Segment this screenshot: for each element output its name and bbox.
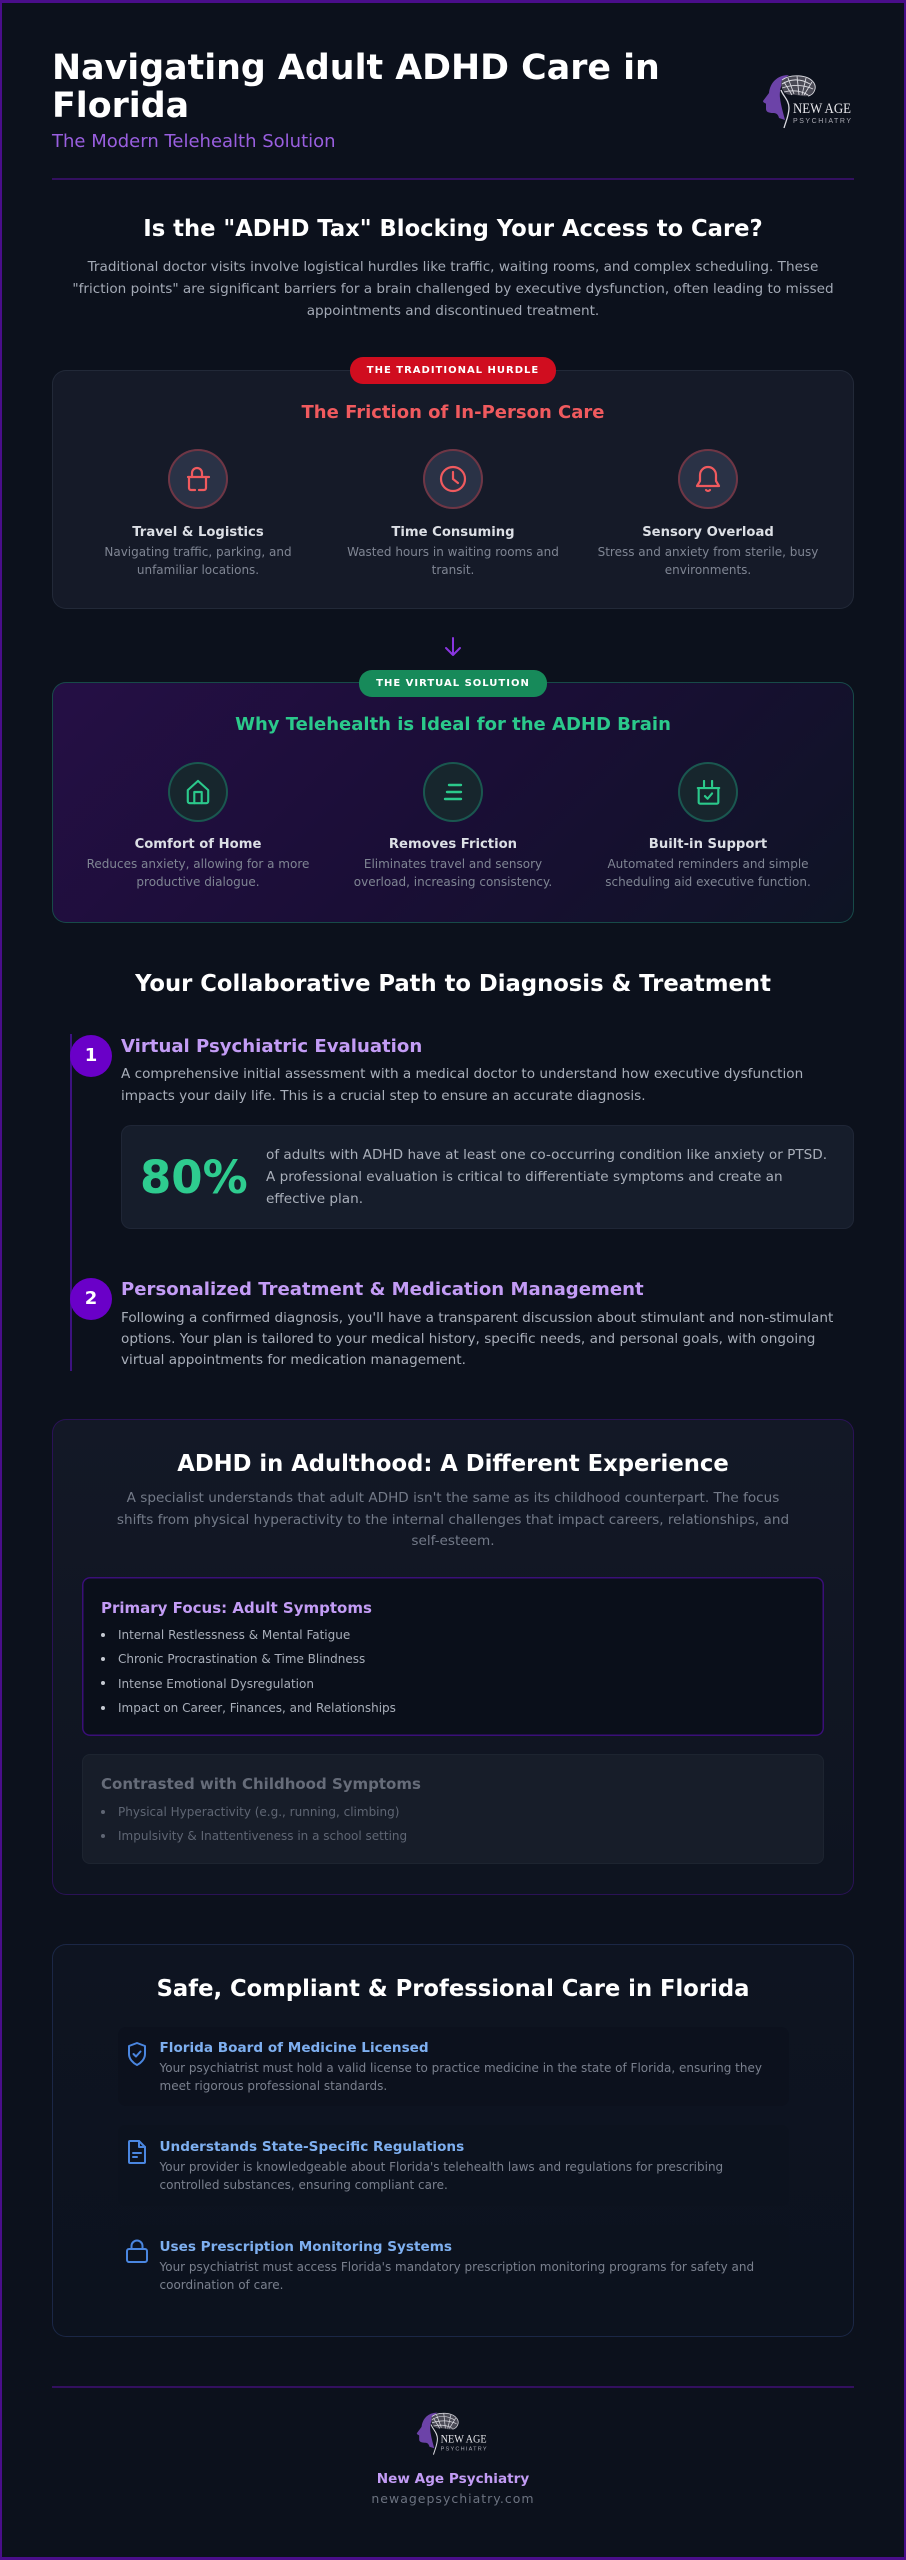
step 1 description: A comprehensive initial assessment with a medical doctor to understand how executive dysfunction xyxy=(121,1066,803,1082)
symptom list xyxy=(101,1628,396,1715)
step 2 description: options. Your plan is tailored to your medical history, specific needs, and personal goals, with ongoing xyxy=(121,1331,815,1347)
feature: time consuming: transit. xyxy=(432,563,474,577)
icon: lock xyxy=(126,2240,148,2263)
step 2 description xyxy=(121,1310,833,1368)
step 2 description: virtual appointments for medication management. xyxy=(121,1352,466,1368)
subtitle: The Modern Telehealth Solution xyxy=(52,131,336,152)
symptom list: Intense Emotional Dysregulation xyxy=(118,1677,314,1691)
logo: New Age Psychiatry header: PSYCHIATRY xyxy=(793,118,851,125)
feature: comfort of home xyxy=(87,762,309,889)
panel description xyxy=(117,1490,789,1549)
intro paragraph xyxy=(72,258,834,318)
icon: travel bag xyxy=(168,449,228,509)
panel description: A specialist understands that adult ADHD isn't the same as its childhood counterpart. The focus xyxy=(127,1490,779,1506)
stat description: A professional evaluation is critical to differentiate symptoms and create an xyxy=(266,1168,783,1184)
feature: built-in support: Automated reminders and simple xyxy=(607,857,809,871)
step 2 xyxy=(70,1278,833,1368)
step number 1 xyxy=(70,1035,112,1077)
step number 1: 1 xyxy=(85,1045,97,1066)
icon: list lines xyxy=(423,762,483,822)
badge: the traditional hurdle: THE TRADITIONAL HURDLE xyxy=(367,365,539,376)
feature: sensory overload: Sensory Overload xyxy=(642,525,774,540)
title: Navigating Adult ADHD Care in xyxy=(52,48,660,88)
feature: built-in support: scheduling aid executive function. xyxy=(605,875,811,889)
card title: Primary Focus: Adult Symptoms xyxy=(101,1599,372,1617)
feature: built-in support: Built-in Support xyxy=(649,837,767,852)
card title: Contrasted with Childhood Symptoms xyxy=(101,1775,421,1793)
heading: friction of in-person care: The Friction of In-Person Care xyxy=(302,402,604,423)
heading: why telehealth is ideal: Why Telehealth is Ideal for the ADHD Brain xyxy=(235,714,671,735)
item: state regulations: controlled substances, ensuring compliant care. xyxy=(160,2178,448,2192)
panel heading: ADHD in Adulthood: A Different Experience xyxy=(177,1451,729,1477)
childhood list xyxy=(101,1805,407,1843)
feature: sensory overload xyxy=(598,449,818,577)
icon: bell xyxy=(678,449,738,509)
arrow: down xyxy=(445,637,461,656)
item: board licensed: Florida Board of Medicine Licensed xyxy=(160,2040,429,2056)
card: childhood symptoms xyxy=(82,1754,824,1864)
logo: New Age Psychiatry footer: PSYCHIATRY xyxy=(441,2447,487,2453)
badge: the traditional hurdle xyxy=(350,357,556,384)
step 1 xyxy=(70,1035,854,1229)
panel description: shifts from physical hyperactivity to the internal challenges that impact careers, relationships, and xyxy=(117,1512,789,1528)
icon: clock xyxy=(423,449,483,509)
footer brand name: New Age Psychiatry xyxy=(377,2470,529,2486)
feature: time consuming: Time Consuming xyxy=(391,525,515,540)
stat description xyxy=(266,1146,827,1206)
feature: time consuming xyxy=(347,449,559,577)
item: board licensed xyxy=(118,2027,788,2106)
item: prescription monitoring xyxy=(118,2225,788,2305)
symptom list: Internal Restlessness & Mental Fatigue xyxy=(118,1628,350,1642)
feature: travel and logistics: Travel & Logistics xyxy=(132,525,264,540)
feature: time consuming: Wasted hours in waiting rooms and xyxy=(347,545,559,559)
timeline line xyxy=(70,1034,72,1371)
panel: safe and compliant care xyxy=(52,1944,854,2337)
card: primary adult symptoms xyxy=(82,1577,824,1736)
step 1 description xyxy=(121,1066,803,1104)
item: state regulations: Your provider is knowledgeable about Florida's telehealth laws and regulations for prescribing xyxy=(160,2160,723,2174)
step 2 title: Personalized Treatment & Medication Management xyxy=(121,1279,644,1300)
logo: New Age Psychiatry header xyxy=(763,75,851,128)
item: board licensed: meet rigorous professional standards. xyxy=(160,2079,387,2093)
title: Florida xyxy=(52,86,189,126)
panel heading: Safe, Compliant & Professional Care in Florida xyxy=(157,1976,749,2002)
symptom list: Impact on Career, Finances, and Relationships xyxy=(118,1701,396,1715)
icon: calendar check xyxy=(678,762,738,822)
icon: house xyxy=(168,762,228,822)
feature: travel and logistics xyxy=(104,449,292,577)
feature: comfort of home: Comfort of Home xyxy=(135,837,261,852)
feature: removes friction: Eliminates travel and sensory xyxy=(364,857,542,871)
section heading: collaborative path: Your Collaborative Path to Diagnosis & Treatment xyxy=(135,971,771,997)
intro paragraph: Traditional doctor visits involve logistical hurdles like traffic, waiting rooms, and complex scheduling. These xyxy=(88,258,818,274)
childhood list: Physical Hyperactivity (e.g., running, climbing) xyxy=(118,1805,399,1819)
panel description: self-esteem. xyxy=(411,1533,495,1549)
stat description: effective plan. xyxy=(266,1190,363,1206)
step 2 description: Following a confirmed diagnosis, you'll have a transparent discussion about stimulant and non-stimulant xyxy=(121,1310,833,1326)
stat callout: 80% xyxy=(121,1125,854,1229)
panel: virtual solution xyxy=(52,682,854,923)
intro paragraph: appointments and discontinued treatment. xyxy=(307,302,599,318)
item: prescription monitoring: Uses Prescription Monitoring Systems xyxy=(160,2239,452,2255)
header divider xyxy=(52,178,854,180)
feature: sensory overload: Stress and anxiety from sterile, busy xyxy=(598,545,818,559)
feature: travel and logistics: unfamiliar locations. xyxy=(137,563,259,577)
icon: document xyxy=(128,2140,146,2164)
footer website: newagepsychiatry.com xyxy=(371,2491,535,2506)
feature: travel and logistics: Navigating traffic, parking, and xyxy=(104,545,292,559)
feature: comfort of home: Reduces anxiety, allowing for a more xyxy=(87,857,309,871)
logo: New Age Psychiatry footer xyxy=(416,2412,487,2455)
feature: removes friction: overload, increasing consistency. xyxy=(354,875,552,889)
stat description: of adults with ADHD have at least one co-occurring condition like anxiety or PTSD. xyxy=(266,1146,827,1162)
panel: traditional hurdle xyxy=(52,370,854,609)
feature: built-in support xyxy=(605,762,811,889)
title xyxy=(52,48,660,126)
intro paragraph: "friction points" are significant barriers for a brain challenged by executive dysfunction, often leading to missed xyxy=(72,280,834,296)
intro heading: Is the "ADHD Tax" Blocking Your Access to Care? xyxy=(143,216,763,242)
feature: comfort of home: productive dialogue. xyxy=(136,875,260,889)
footer divider xyxy=(52,2386,854,2388)
item: board licensed: Your psychiatrist must hold a valid license to practice medicine in the state of Florida, ensuring they xyxy=(160,2061,762,2075)
symptom list: Chronic Procrastination & Time Blindness xyxy=(118,1652,365,1666)
badge: the virtual solution xyxy=(359,670,547,697)
step number 2 xyxy=(70,1278,112,1320)
step number 2: 2 xyxy=(85,1288,97,1309)
feature: sensory overload: environments. xyxy=(665,563,751,577)
badge: the virtual solution: THE VIRTUAL SOLUTION xyxy=(376,678,530,689)
icon: shield xyxy=(128,2042,146,2066)
stat number: 80% xyxy=(140,1151,248,1204)
panel: ADHD in adulthood xyxy=(52,1419,854,1895)
item: state regulations xyxy=(118,2125,788,2206)
item: prescription monitoring: coordination of care. xyxy=(160,2278,283,2292)
feature: removes friction xyxy=(354,762,552,889)
item: prescription monitoring: Your psychiatrist must access Florida's mandatory prescription monitoring programs for safety and xyxy=(160,2260,754,2274)
step 1 title: Virtual Psychiatric Evaluation xyxy=(121,1036,422,1057)
item: state regulations: Understands State-Specific Regulations xyxy=(160,2139,464,2155)
feature: removes friction: Removes Friction xyxy=(389,837,517,852)
step 1 description: impacts your daily life. This is a crucial step to ensure an accurate diagnosis. xyxy=(121,1088,646,1104)
childhood list: Impulsivity & Inattentiveness in a school setting xyxy=(118,1829,407,1843)
